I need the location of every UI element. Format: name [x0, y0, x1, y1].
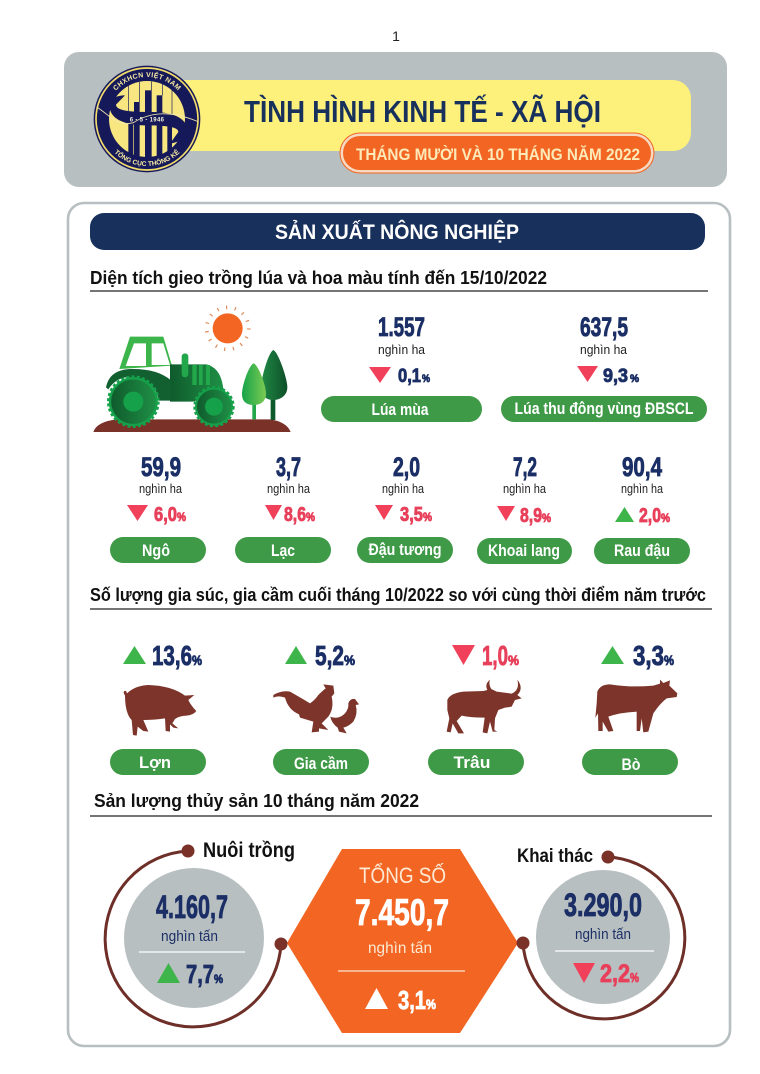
stat: Ngô: [110, 452, 206, 563]
stat: Lúa mùa: nghìn ha: [378, 342, 426, 357]
subtitle pill: THÁNG MƯỜI VÀ 10 THÁNG NĂM 2022: [356, 145, 640, 164]
circle: Nuôi trồng stat: 7,7: [186, 959, 214, 989]
stat: Bò: [582, 640, 678, 775]
stat: Lúa mùa: [321, 312, 482, 422]
stat: Khoai lang: Khoai lang: [488, 541, 560, 560]
circle: Khai thác stat: %: [630, 970, 639, 985]
stat: Đậu tương: 3,5: [400, 504, 423, 526]
stat: Lúa thu đông vùng ĐBSCL: nghìn ha: [580, 342, 628, 357]
circle: Nuôi trồng stat: nghìn tấn: [161, 929, 218, 945]
stat: Lạc: 3,7: [276, 452, 301, 482]
hexagon: total: %: [426, 996, 436, 1012]
section heading: agriculture: [90, 213, 705, 250]
stat: Đậu tương: nghìn ha: [382, 481, 425, 496]
icon: pig: [124, 685, 196, 736]
stat: Khoai lang: [477, 452, 572, 564]
stat: Ngô: 59,9: [141, 452, 181, 482]
section heading: agriculture: SẢN XUẤT NÔNG NGHIỆP: [275, 220, 519, 244]
stat: Bò: %: [664, 652, 674, 668]
stat: Gia cầm: [273, 640, 369, 775]
stat: Lạc: nghìn ha: [267, 481, 311, 496]
header banner: [64, 52, 727, 187]
stat: Rau đậu: Rau đậu: [614, 541, 670, 560]
stat: Khoai lang: nghìn ha: [503, 481, 547, 496]
stat: Lạc: 8,6: [284, 504, 306, 526]
stat: Lúa thu đông vùng ĐBSCL: 9,3: [603, 366, 628, 387]
circle: Khai thác stat: nghìn tấn: [575, 927, 631, 943]
title: TÌNH HÌNH KINH TẾ - XÃ HỘI: [244, 93, 601, 129]
stat: Ngô: nghìn ha: [139, 481, 183, 496]
stat: Rau đậu: 90,4: [622, 452, 662, 482]
stat: Lúa thu đông vùng ĐBSCL: %: [630, 373, 639, 385]
stat: Lợn: Lợn: [139, 753, 171, 772]
stat: Khoai lang: 7,2: [513, 452, 537, 482]
stat: Lúa mùa: 0,1: [398, 366, 421, 387]
stat: Lợn: %: [192, 652, 202, 668]
hexagon: total: 7.450,7: [355, 892, 449, 933]
heading: planted area: Diện tích gieo trồng lúa và hoa màu tính đến 15/10/2022: [90, 268, 547, 288]
stat: Khoai lang: 8,9: [520, 505, 542, 527]
logo: 6 - 5 - 1946: [130, 117, 165, 123]
stat: Lợn: 13,6: [152, 640, 192, 671]
stat: Lúa mùa: %: [422, 373, 430, 385]
logo: TỔNG CỤC THỐNG KÊ: [115, 149, 180, 166]
icon: tractor with sun and trees: [93, 307, 291, 432]
stat: Ngô: %: [177, 510, 186, 524]
hexagon: total: 3,1: [398, 985, 426, 1015]
ring: Khai thác: Khai thác: [517, 846, 593, 867]
stat: Lạc: [235, 452, 331, 563]
subtitle pill: [340, 133, 654, 173]
heading: fisheries: Sản lượng thủy sản 10 tháng năm 2022: [94, 790, 419, 811]
stat: Lúa mùa: 1.557: [378, 312, 425, 342]
stat: Lúa mùa: Lúa mùa: [372, 400, 429, 419]
circle: Nuôi trồng stat: 4.160,7: [156, 889, 228, 925]
stat: Trâu: Trâu: [454, 753, 490, 772]
circle: Nuôi trồng stat: %: [214, 972, 223, 986]
stat: Gia cầm: Gia cầm: [294, 754, 348, 773]
stat: Bò: 3,3: [633, 640, 664, 671]
stat: Đậu tương: %: [423, 510, 432, 524]
ring: Nuôi trồng: [105, 839, 295, 1027]
stat: Trâu: [428, 640, 524, 775]
panel: main content: [68, 203, 730, 1046]
stat: Rau đậu: nghìn ha: [621, 481, 664, 496]
circle: Khai thác stat: 3.290,0: [564, 887, 642, 923]
stat: Bò: Bò: [622, 755, 640, 774]
stat: Ngô: Ngô: [142, 541, 170, 560]
stat: Gia cầm: 5,2: [315, 640, 344, 671]
hexagon: total: nghìn tấn: [368, 940, 432, 957]
page number: 1: [392, 28, 400, 44]
stat: Lúa thu đông vùng ĐBSCL: 637,5: [580, 312, 628, 342]
stat: Đậu tương: Đậu tương: [368, 540, 442, 559]
stat: Lợn: [110, 640, 206, 775]
circle: Khai thác stat: 2,2: [600, 960, 630, 988]
stat: Lúa thu đông vùng ĐBSCL: [501, 312, 707, 422]
stat: Khoai lang: %: [542, 511, 551, 525]
stat: Đậu tương: [357, 452, 453, 563]
stat: Rau đậu: 2,0: [639, 505, 661, 527]
stat: Lạc: Lạc: [271, 541, 295, 560]
icon: buffalo: [447, 680, 522, 733]
stat: Đậu tương: 2,0: [393, 452, 420, 482]
stat: Ngô: 6,0: [154, 504, 177, 526]
icon: chicken and duck: [273, 684, 359, 733]
hexagon: total: TỔNG SỐ: [359, 862, 446, 888]
logo: CHXHCN VIỆT NAM: [113, 72, 181, 90]
circle: Khai thác stat: [536, 870, 670, 1004]
stat: Trâu: %: [508, 652, 519, 668]
icon: cow: [595, 680, 677, 732]
logo: [94, 66, 200, 172]
stat: Rau đậu: %: [661, 511, 670, 525]
stat: Trâu: 1,0: [482, 640, 508, 671]
ring: Nuôi trồng: Nuôi trồng: [203, 839, 295, 862]
ring: Khai thác: [516, 846, 685, 1019]
stat: Lạc: %: [306, 510, 315, 524]
stat: Gia cầm: %: [344, 652, 355, 668]
hexagon: total: [287, 849, 518, 1033]
circle: Nuôi trồng stat: [124, 868, 264, 1008]
stat: Rau đậu: [594, 452, 690, 564]
stat: Lúa thu đông vùng ĐBSCL: Lúa thu đông vùng ĐBSCL: [514, 399, 694, 418]
